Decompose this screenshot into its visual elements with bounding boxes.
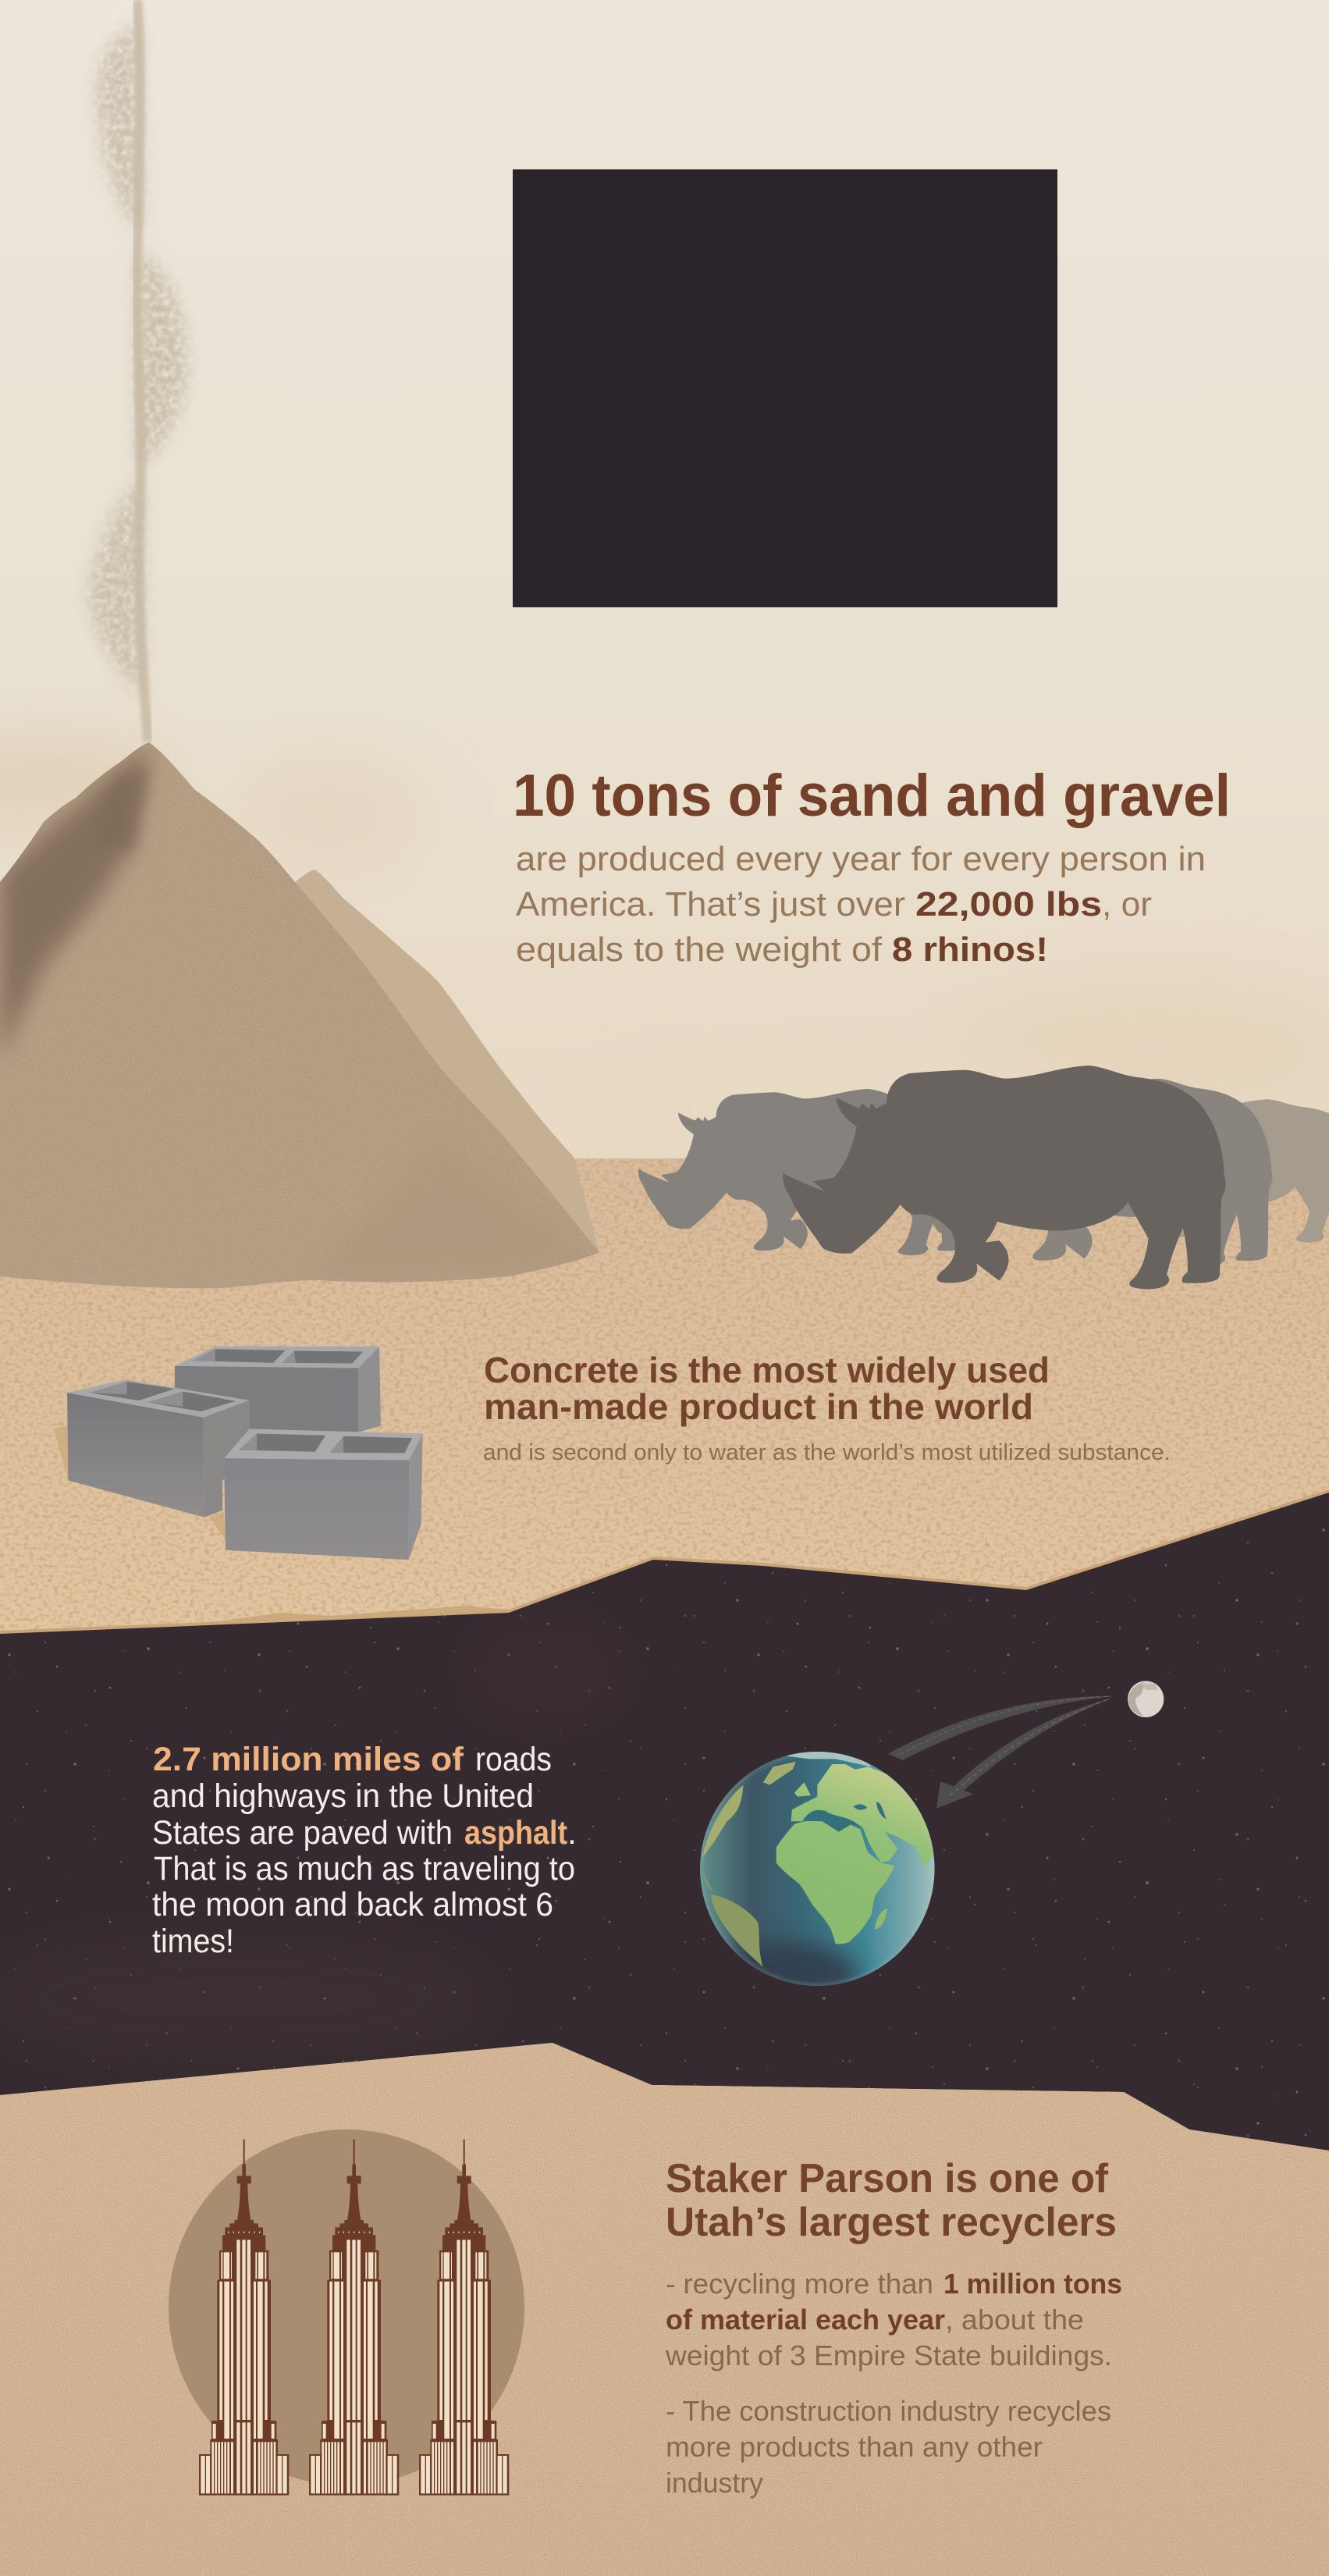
body lines: America. That’s just over <box>516 885 905 923</box>
bullet one: of material each year <box>666 2304 945 2336</box>
body lines <box>516 840 1206 969</box>
body lines: are produced every year for every person in <box>516 840 1206 878</box>
block shadows <box>54 1425 226 1540</box>
heading <box>666 2156 1117 2245</box>
text block: asphalt roads: That is as much as traveling to <box>154 1850 575 1888</box>
empire state building 3 <box>419 2140 509 2496</box>
panel: bottom sand section <box>0 2043 1329 2576</box>
heading: Utah’s largest recyclers <box>666 2200 1117 2245</box>
rhino silhouette, front <box>783 1066 1226 1290</box>
panel: dark asphalt space band <box>0 1483 1329 2154</box>
bullet one: weight of 3 Empire State buildings. <box>665 2339 1112 2371</box>
text block: asphalt roads: the moon and back almost 6 <box>152 1886 553 1923</box>
icon: disc behind buildings <box>169 2129 524 2485</box>
front block <box>224 1429 423 1560</box>
icon: three Empire State buildings <box>199 2140 509 2496</box>
icon: moon <box>1128 1681 1164 1717</box>
rhino silhouette, left <box>638 1089 971 1255</box>
icon: sand piles <box>0 734 609 1296</box>
bullet two: - The construction industry recycles <box>666 2395 1111 2427</box>
text block: asphalt roads: and highways in the United <box>152 1777 534 1815</box>
icon: concrete blocks <box>54 1347 423 1560</box>
text block: asphalt roads: asphalt <box>464 1814 567 1852</box>
heading: man-made product in the world <box>484 1386 1033 1427</box>
text block: concrete <box>483 1350 1171 1465</box>
icon: earth <box>700 1752 935 1986</box>
bullet two: industry <box>666 2467 763 2499</box>
illustration: earth, moon and road arrows <box>698 1681 1164 2008</box>
text block: asphalt roads: times! <box>152 1923 234 1960</box>
continents <box>776 1764 937 1944</box>
body lines: equals to the weight of <box>516 930 883 969</box>
main sand pile <box>0 734 609 1296</box>
back sand pile <box>295 870 599 1252</box>
body lines: , or <box>1102 885 1152 923</box>
body lines: 22,000 lbs <box>915 885 1102 923</box>
heading: 10 tons of sand and gravel <box>513 763 1231 829</box>
empire state building 1 <box>199 2140 289 2496</box>
back block <box>175 1347 381 1433</box>
ground: sand foreground <box>0 1158 1329 1634</box>
background: sky <box>0 0 1329 1171</box>
heading: Staker Parson is one of <box>666 2156 1109 2201</box>
seas <box>802 1802 887 1832</box>
rhinos: herd of silhouettes <box>638 1066 1329 1290</box>
subtext: and is second only to water as the world’s most utilized substance. <box>483 1440 1171 1465</box>
text block: Staker Parson recyclers <box>665 2156 1122 2499</box>
rhino silhouette, middle rear <box>905 1079 1272 1266</box>
heading: Concrete is the most widely used <box>484 1350 1050 1390</box>
body lines: 8 rhinos! <box>892 930 1048 969</box>
text block: asphalt roads: States are paved with <box>152 1814 453 1852</box>
rhino silhouette, far right <box>1054 1099 1329 1243</box>
black title block <box>513 169 1057 607</box>
left block <box>67 1379 251 1517</box>
bullet one: 1 million tons <box>943 2268 1122 2300</box>
text block: asphalt roads: 2.7 million miles of <box>153 1741 464 1778</box>
arrow: road from moon to earth, lower with head <box>936 1698 1113 1809</box>
bullet two <box>666 2395 1111 2499</box>
dust haze <box>0 734 1329 1155</box>
bullet two: more products than any other <box>666 2431 1043 2463</box>
empire state building 2 <box>309 2140 399 2496</box>
heading <box>484 1350 1050 1427</box>
bullet one: - recycling more than <box>666 2268 933 2300</box>
text block: asphalt roads: . <box>567 1814 577 1852</box>
arrow: road from moon to earth, upper <box>888 1696 1111 1760</box>
bullet one <box>665 2268 1122 2371</box>
bullet one: , about the <box>945 2304 1084 2336</box>
smoke: sand column rising from the pile <box>88 0 188 742</box>
text block: asphalt roads <box>152 1741 577 1960</box>
text block: 10 tons of sand and gravel <box>513 763 1231 969</box>
text block: asphalt roads: roads <box>475 1741 552 1778</box>
